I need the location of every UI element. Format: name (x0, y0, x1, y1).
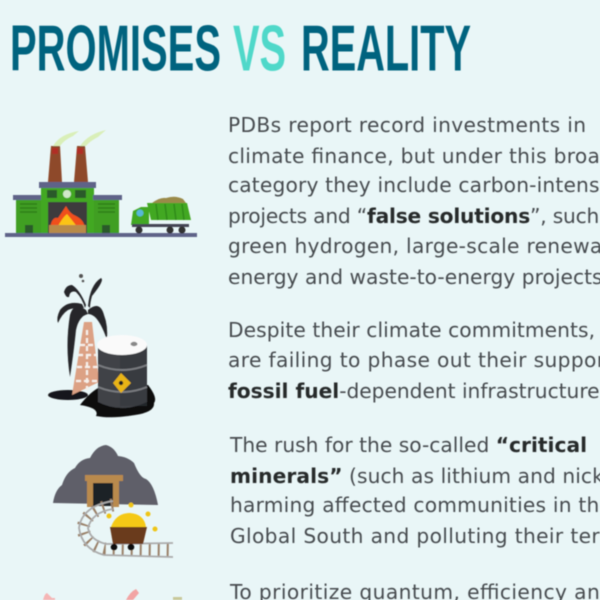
icon: mine and cart (53, 445, 173, 557)
text block: critical minerals: The rush for the so-called “critical (229, 433, 587, 457)
icon: partial bottom illustration (43, 589, 182, 600)
text block: critical minerals (229, 433, 600, 548)
text block: fossil fuel: fossil fuel-dependent infrastructure. (228, 379, 600, 403)
title: REALITY (301, 12, 471, 84)
text block: false solutions: energy and waste-to-energy projects. (228, 265, 600, 289)
title: PROMISES (10, 12, 221, 84)
icon: oil derrick and barrel (48, 274, 155, 417)
text block: false solutions (228, 113, 600, 289)
title: VS (233, 12, 286, 84)
text block: fossil fuel (228, 318, 600, 403)
text block: false solutions: PDBs report record investments in (228, 113, 586, 137)
icon: factory and garbage truck (5, 130, 197, 237)
